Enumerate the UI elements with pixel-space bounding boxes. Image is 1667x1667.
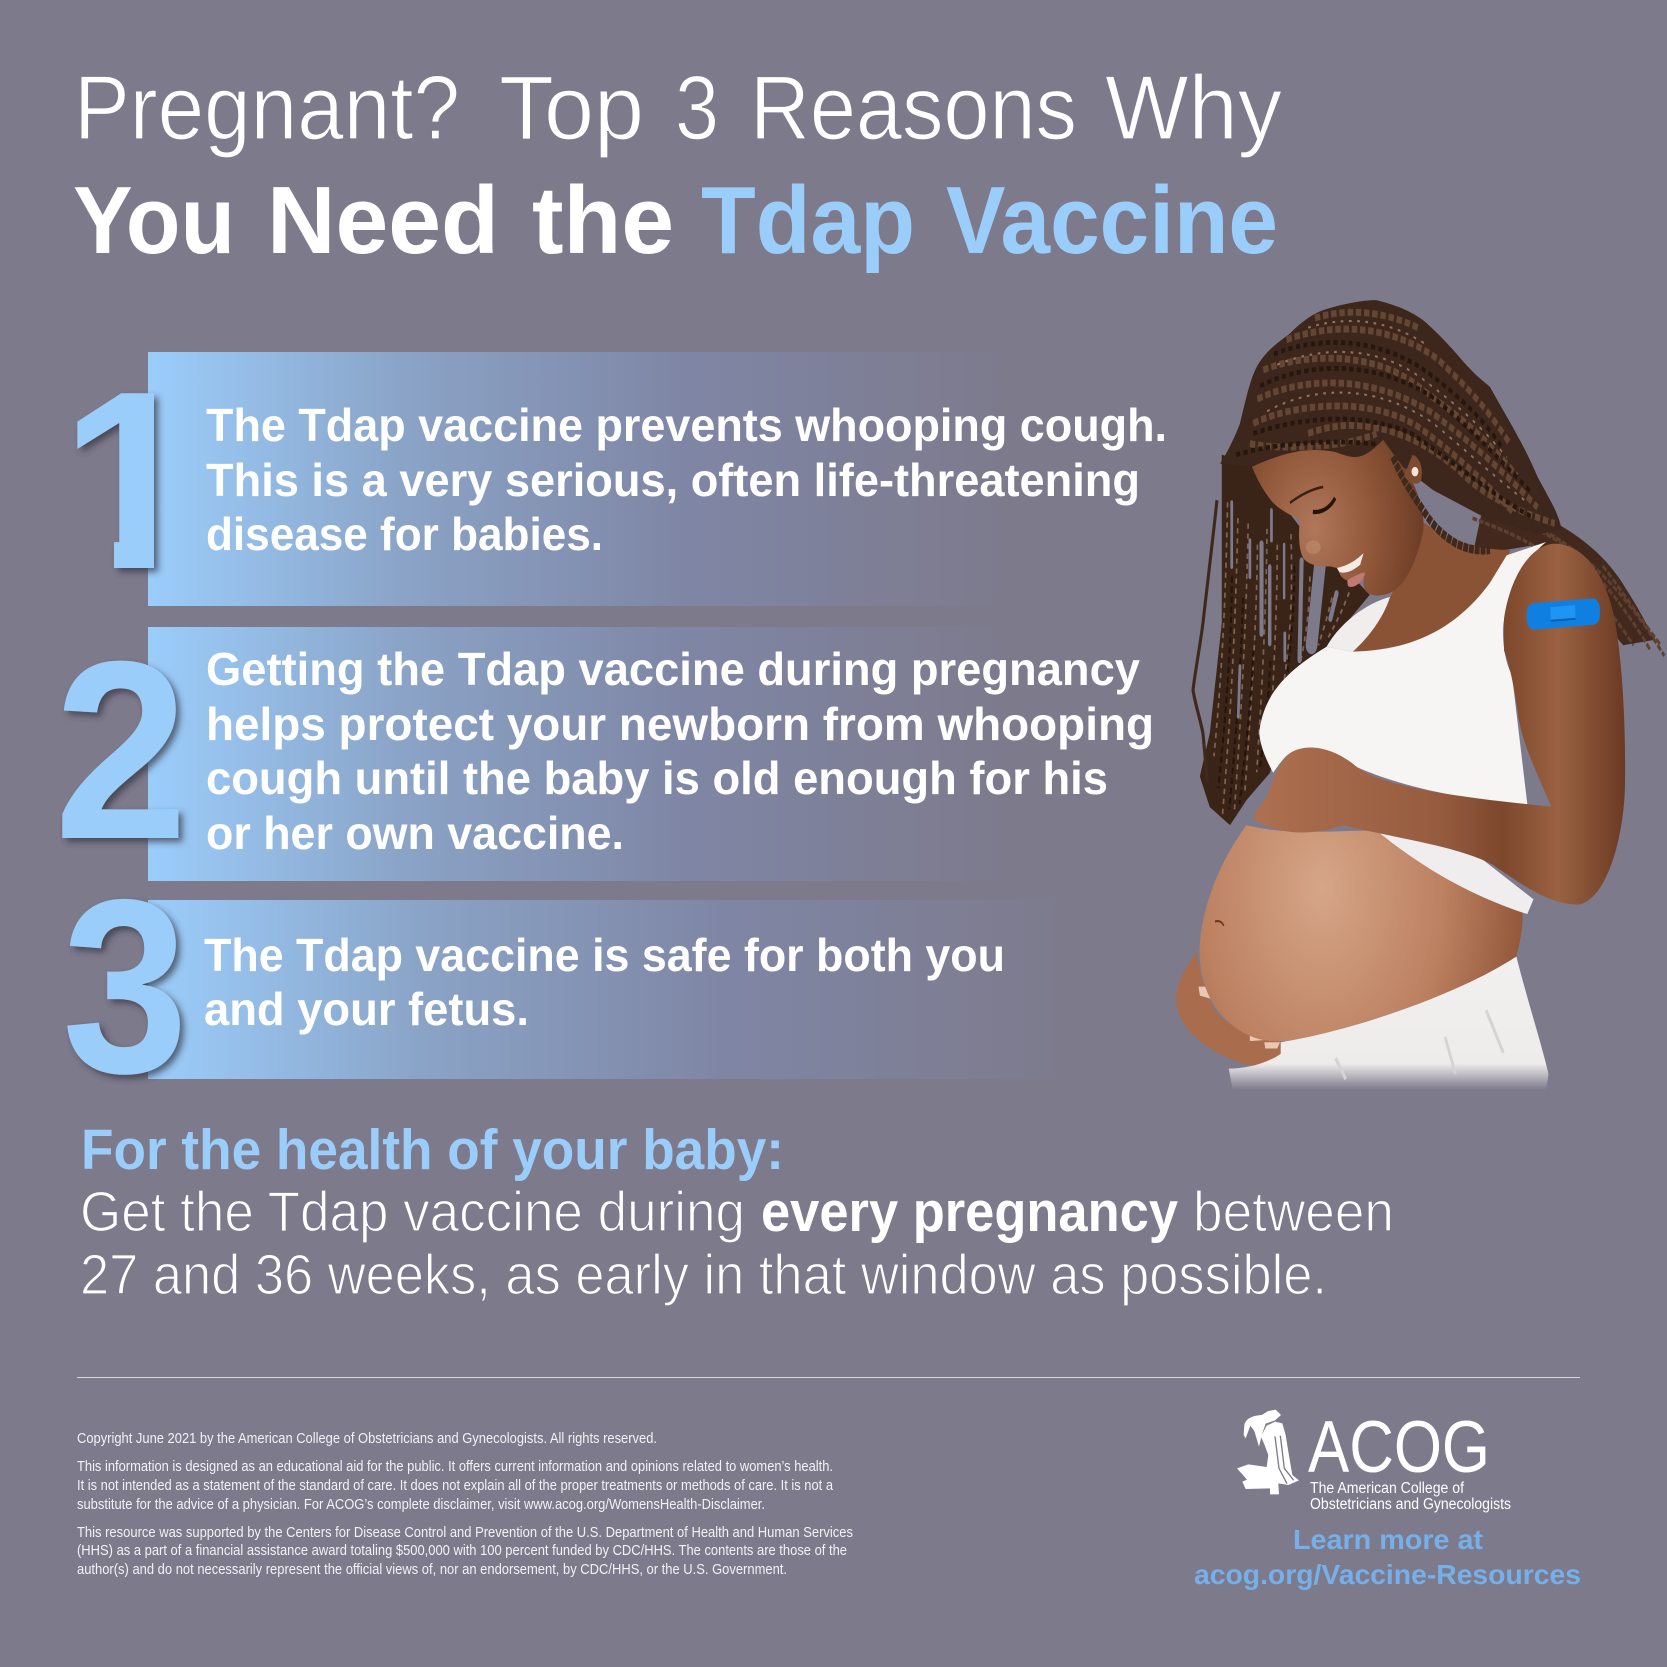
white tank top xyxy=(1259,542,1546,914)
icon: mother lifting baby xyxy=(1237,1410,1299,1494)
footer disclaimer: This information is designed as an educational aid for the public. It offers current information and opinions related to women’s health. xyxy=(77,1458,833,1475)
left braids xyxy=(1193,455,1370,825)
reason 2 text: cough until the baby is old enough for his xyxy=(206,752,1108,804)
footer disclaimer: It is not intended as a statement of the standard of care. It does not explain all of the proper treatments or methods of care. It is not a xyxy=(77,1477,834,1494)
reason 2 text: Getting the Tdap vaccine during pregnancy xyxy=(206,643,1140,695)
logo subtitle: Obstetricians and Gynecologists xyxy=(1310,1496,1511,1513)
footer disclaimer: (HHS) as a part of a financial assistance award totaling $500,000 with 100 percent funded by CDC/HHS. The contents are those of the xyxy=(77,1542,847,1559)
closing message xyxy=(80,1118,1394,1307)
message heading: For the health of your baby: xyxy=(81,1118,784,1182)
title line 2 xyxy=(73,167,1278,274)
title line 2: You xyxy=(73,167,235,274)
bandage xyxy=(1526,598,1600,630)
gaps between braids xyxy=(1232,502,1337,717)
hair over shoulder xyxy=(1472,492,1664,656)
footer disclaimer xyxy=(77,1430,853,1578)
reason 1 text: This is a very serious, often life-threatening xyxy=(206,454,1140,506)
arm and hand on belly xyxy=(1254,544,1625,905)
footer disclaimer: This resource was supported by the Centers for Disease Control and Prevention of the U.S. Department of Health and Human Services xyxy=(77,1524,853,1541)
photo: smiling pregnant woman with bandage on arm xyxy=(1176,300,1664,1090)
reason 3 text: The Tdap vaccine is safe for both you xyxy=(204,929,1005,981)
title xyxy=(73,58,1282,274)
title line 2: the xyxy=(532,167,674,274)
panel: reason 2 xyxy=(54,608,1154,892)
footer disclaimer: Copyright June 2021 by the American College of Obstetricians and Gynecologists. All rights reserved. xyxy=(77,1430,657,1447)
logo wordmark: ACOG xyxy=(1308,1407,1490,1488)
logo subtitle xyxy=(1310,1480,1511,1513)
message line 2: 27 and 36 weeks, as early in that window as possible. xyxy=(80,1243,1327,1307)
navel xyxy=(1215,921,1224,926)
title line 2: Need xyxy=(267,167,499,274)
reason 1 text xyxy=(206,399,1167,560)
neck and chest xyxy=(1353,508,1510,653)
title line 1: Why xyxy=(1105,58,1282,159)
footer disclaimer: author(s) and do not necessarily represent the official views of, nor an endorsement, by CDC/HHS, or the U.S. Government. xyxy=(77,1561,787,1578)
panel: reason 1 xyxy=(77,352,1164,606)
message line 1: Get the Tdap vaccine during xyxy=(80,1180,745,1244)
message line 1: between xyxy=(1193,1180,1394,1244)
reason 2 text: or her own vaccine. xyxy=(206,807,624,859)
call to action link: Learn more at xyxy=(1293,1524,1483,1555)
number 3: 3 xyxy=(62,847,188,1125)
reason 2 text xyxy=(206,643,1154,859)
reason 3 text xyxy=(204,929,1005,1035)
belly xyxy=(1200,825,1523,1041)
reason 1 text: disease for babies. xyxy=(206,508,603,560)
white trousers xyxy=(1229,956,1549,1090)
title line 1: Reasons xyxy=(750,58,1077,159)
message line 1 xyxy=(80,1180,1394,1244)
reason 1 text: The Tdap vaccine prevents whooping cough. xyxy=(206,399,1167,451)
footer disclaimer: substitute for the advice of a physician. For ACOG’s complete disclaimer, visit www.acog.org/WomensHealth-Disclaimer. xyxy=(77,1496,765,1513)
title line 1: 3 xyxy=(675,58,719,159)
message line 1: every pregnancy xyxy=(761,1180,1178,1244)
title line 1: Top xyxy=(499,58,644,159)
top hair mass xyxy=(1220,300,1562,550)
number 1: 1 xyxy=(60,338,201,622)
reason 2 text: helps protect your newborn from whooping xyxy=(206,698,1154,750)
call to action link xyxy=(1194,1524,1581,1590)
title line 2: Vaccine xyxy=(946,167,1278,274)
reason 3 text: and your fetus. xyxy=(204,983,529,1035)
face xyxy=(1252,438,1424,596)
call to action link: acog.org/Vaccine-Resources xyxy=(1194,1559,1581,1590)
title line 1 xyxy=(74,58,1282,159)
title line 1: Pregnant? xyxy=(74,58,460,159)
panel: reason 3 xyxy=(62,847,1073,1125)
logo subtitle: The American College of xyxy=(1310,1480,1465,1497)
title line 2: Tdap xyxy=(701,167,915,274)
lower hand xyxy=(1176,952,1281,1066)
ACOG logo xyxy=(1237,1407,1511,1513)
number 2: 2 xyxy=(54,608,188,892)
